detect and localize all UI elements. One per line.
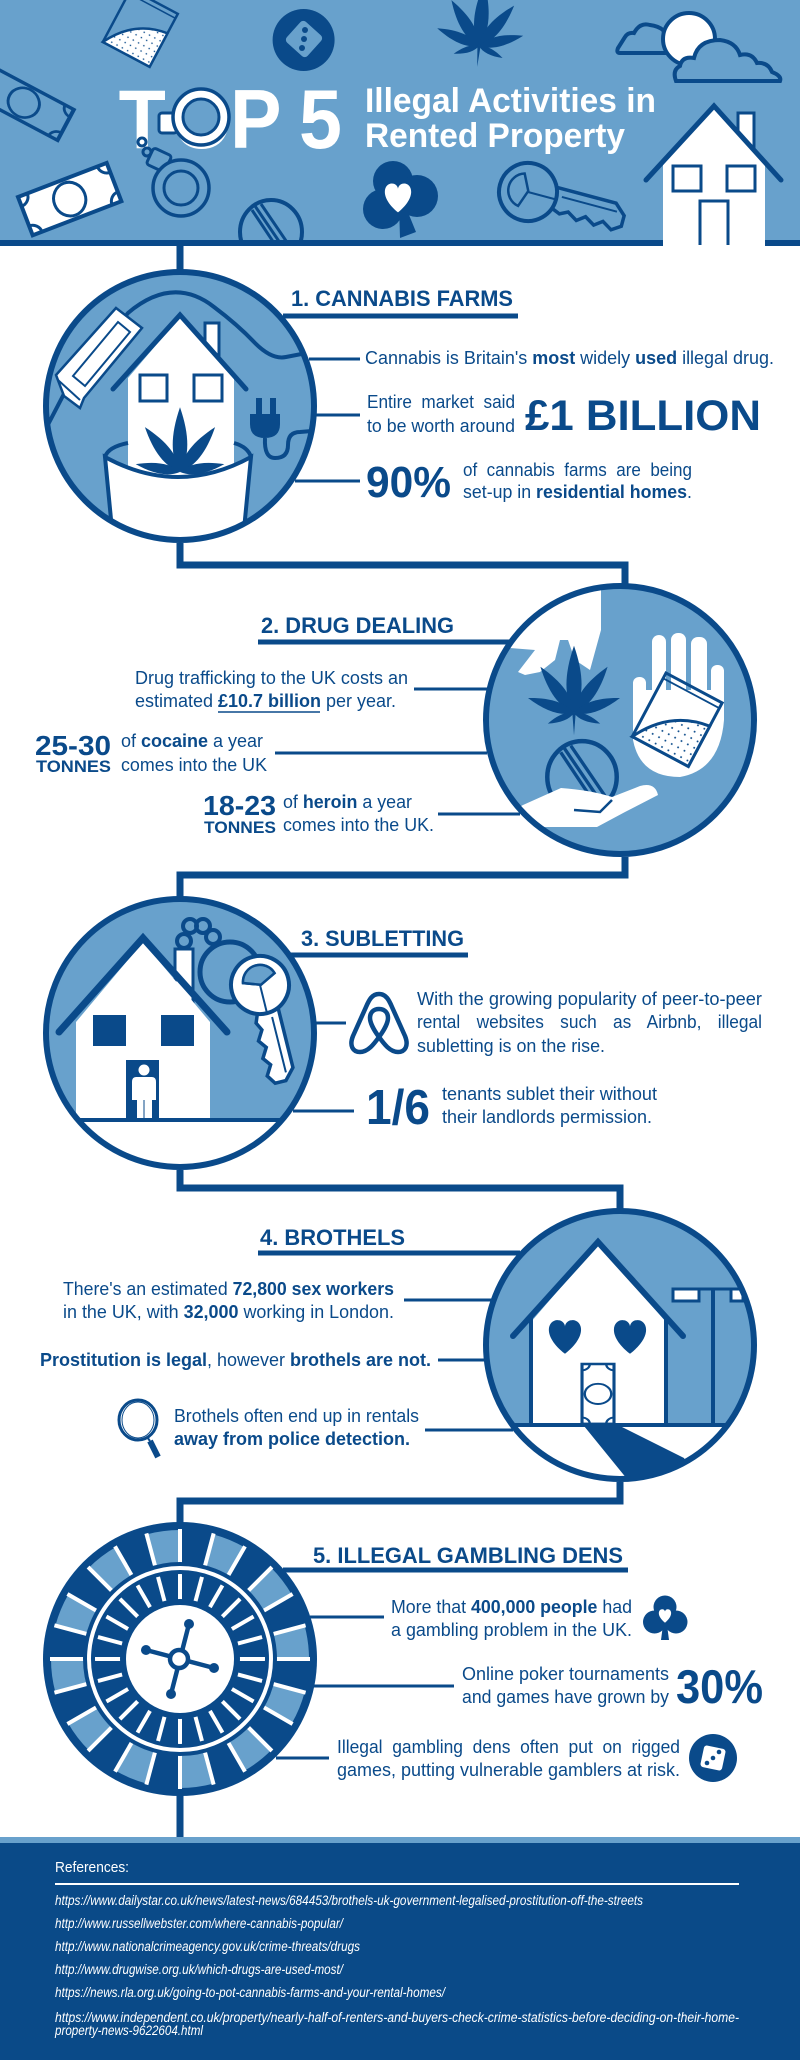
stat: market worth: Entire market said (367, 392, 515, 412)
references list: https://www.independent.co.uk/property/nearly-half-of-renters-and-buyers-check-crime-statistics-before-deciding-on-their-home- (55, 2010, 739, 2025)
text: sex worker numbers: There's an estimated 72,800 sex workers (63, 1279, 394, 1299)
stat: heroin tonnes: 18-23 (203, 790, 276, 821)
title (119, 73, 656, 167)
heading: brothels: 4. BROTHELS (260, 1225, 405, 1250)
text: rigged games: games, putting vulnerable gamblers at risk. (337, 1760, 680, 1780)
illustration: house with hearts and street lamp (480, 1211, 760, 1490)
text: gambling problem (391, 1597, 632, 1640)
references heading: References: (55, 1859, 129, 1876)
text: police detection (174, 1406, 419, 1449)
stat: heroin tonnes: comes into the UK. (283, 815, 434, 835)
heading: illegal gambling dens: 5. ILLEGAL GAMBLING DENS (313, 1543, 623, 1568)
heading: cannabis farms: 1. CANNABIS FARMS (291, 286, 513, 311)
text: cost of trafficking (135, 668, 408, 712)
icon: club small (643, 1596, 688, 1640)
icon: magnifying glass (119, 1400, 158, 1457)
text: rigged games (337, 1737, 680, 1780)
panel: drug dealing (35, 580, 754, 854)
stat: online poker growth: Online poker tournaments (462, 1664, 669, 1684)
text: rigged games: Illegal gambling dens often put on rigged (337, 1737, 680, 1757)
references list: http://www.russellwebster.com/where-cannabis-popular/ (55, 1916, 344, 1931)
stat: heroin tonnes: of heroin a year (283, 792, 412, 812)
text: cost of trafficking: Drug trafficking to the UK costs an (135, 668, 408, 688)
icon: key (492, 156, 631, 246)
icon: airbnb logo (351, 994, 407, 1052)
stat: 90 percent (366, 458, 692, 507)
text: peer to peer rental: rental websites such as Airbnb, illegal (417, 1012, 762, 1032)
stat: one in six tenants: 1/6 (366, 1081, 430, 1135)
icon: dice small (689, 1734, 737, 1782)
stat: cocaine tonnes: 25-30 (35, 730, 111, 761)
illustration: house with plant (40, 272, 314, 540)
stat: heroin tonnes: TONNES (204, 818, 276, 837)
icon: house (646, 106, 781, 246)
stat: one in six tenants: their landlords permission. (442, 1107, 652, 1127)
icon: bank note outline (0, 65, 74, 140)
stat: one in six tenants: tenants sublet their without (442, 1084, 657, 1104)
stat: market worth (367, 392, 761, 440)
panel: brothels (40, 1211, 760, 1490)
references list: https://news.rla.org.uk/going-to-pot-cannabis-farms-and-your-rental-homes/ (55, 1985, 446, 2000)
references list: http://www.nationalcrimeagency.gov.uk/crime-threats/drugs (55, 1939, 360, 1954)
title: Illegal Activities in (365, 82, 656, 120)
text: sex worker numbers: in the UK, with 32,000 working in London. (63, 1302, 394, 1322)
references list: property-news-9622604.html (54, 2023, 204, 2038)
stat: heroin tonnes (203, 790, 434, 837)
stat: cocaine tonnes: comes into the UK (121, 755, 267, 775)
stat: cocaine tonnes (35, 730, 267, 776)
text: police detection: Brothels often end up in rentals (174, 1406, 419, 1426)
stat: online poker growth: 30% (676, 1660, 763, 1713)
stat: cocaine tonnes: TONNES (36, 757, 111, 776)
stat: market worth: to be worth around (367, 416, 515, 436)
heading: drug dealing: 2. DRUG DEALING (261, 613, 454, 638)
heading: subletting: 3. SUBLETTING (301, 926, 464, 951)
panel: illegal gambling dens (42, 1521, 763, 1797)
stat: market worth: £1 BILLION (525, 392, 761, 440)
stat: 90 percent: of cannabis farms are being (463, 460, 692, 480)
illustration: hands exchanging drugs (486, 580, 754, 854)
icon: bank note white (18, 163, 121, 235)
text: most used drug: Cannabis is Britain's most widely used illegal drug. (365, 348, 774, 368)
stat: cocaine tonnes: of cocaine a year (121, 731, 263, 751)
text: peer to peer rental: subletting is on the rise. (417, 1036, 605, 1056)
text: police detection: away from police detection. (174, 1429, 410, 1449)
stat: 90 percent: set-up in residential homes. (463, 482, 692, 502)
title: Rented Property (365, 117, 625, 155)
footer: references (0, 1837, 800, 2060)
header banner (0, 0, 800, 264)
panel: cannabis farms (40, 272, 774, 540)
references list: https://www.dailystar.co.uk/news/latest-news/684453/brothels-uk-government-legalised-prostitution-off-the-streets (55, 1893, 643, 1908)
text: peer to peer rental (417, 989, 762, 1056)
text: peer to peer rental: With the growing popularity of peer-to-peer (417, 989, 762, 1009)
text: sex worker numbers (63, 1279, 394, 1322)
icon: club (363, 161, 438, 238)
title: TOP 5 (119, 73, 342, 167)
icon: pill (238, 198, 304, 240)
stat: one in six tenants (366, 1081, 657, 1135)
illustration: roulette wheel (42, 1521, 318, 1797)
references list: http://www.drugwise.org.uk/which-drugs-are-used-most/ (55, 1962, 344, 1977)
icon: sun and clouds (617, 13, 780, 81)
references list (54, 1893, 739, 2038)
text: gambling problem: More that 400,000 people had (391, 1597, 632, 1617)
icon: drug baggie (103, 0, 178, 67)
stat: 90 percent: 90% (366, 458, 451, 507)
illustration: house and key (40, 899, 320, 1180)
stat: online poker growth: and games have grown by (462, 1687, 669, 1707)
stat: online poker growth (462, 1660, 763, 1713)
panel: subletting (40, 899, 762, 1180)
text: legality: Prostitution is legal, however brothels are not. (40, 1350, 431, 1370)
icon: cannabis leaf (433, 0, 529, 71)
text: gambling problem: a gambling problem in the UK. (391, 1620, 632, 1640)
icon: dice badge (273, 9, 335, 71)
text: cost of trafficking: estimated £10.7 billion per year. (135, 691, 396, 711)
icon: handcuffs (138, 89, 229, 216)
